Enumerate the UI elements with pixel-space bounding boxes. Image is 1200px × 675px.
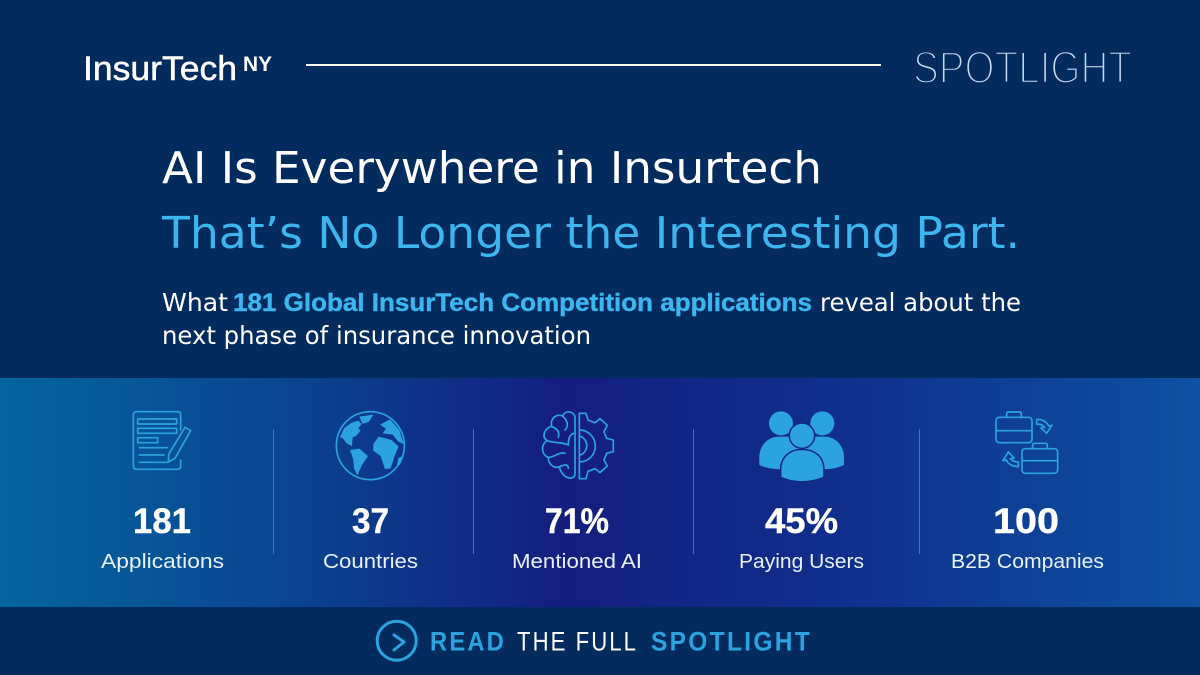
stat: 100 B2B companies: B2B Companies: [951, 550, 1104, 573]
subtitle: What: [162, 288, 228, 317]
subtitle: next phase of insurance innovation: [162, 321, 591, 350]
stat: 71% mentioned AI: [512, 412, 642, 573]
call to action: THE FULL: [517, 626, 638, 656]
stat: 71% mentioned AI: 71%: [545, 502, 609, 541]
title: That’s No Longer the Interesting Part.: [161, 208, 1020, 259]
icon: swapping briefcases: [996, 412, 1058, 473]
stat: 181 applications: 181: [133, 502, 191, 541]
call to action: SPOTLIGHT: [651, 626, 812, 656]
icon: globe: [336, 412, 404, 480]
stats band: [0, 378, 1200, 607]
spotlight wordmark: SPOTLIGHT: [913, 42, 1132, 93]
stat: 181 applications: Applications: [101, 550, 224, 573]
icon: brain and gear: [543, 412, 613, 479]
subtitle: [162, 288, 1021, 350]
call to action: [377, 621, 812, 660]
logo: InsurTech NY: InsurTech: [83, 50, 237, 88]
subtitle: reveal about the: [820, 288, 1021, 317]
stat: 181 applications: [101, 412, 224, 573]
title: AI Is Everywhere in Insurtech: [162, 143, 822, 194]
stat: 37 countries: Countries: [323, 550, 418, 573]
title: [161, 143, 1020, 259]
subtitle: 181 Global InsurTech Competition applications: [233, 289, 812, 317]
stat: 45% paying users: 45%: [765, 502, 838, 541]
logo: InsurTech NY: NY: [243, 52, 272, 76]
icon: document and pencil: [133, 412, 191, 469]
stat: 45% paying users: Paying Users: [739, 550, 864, 573]
header rule: [306, 64, 881, 66]
icon: three people: [759, 411, 844, 482]
header: [83, 42, 1132, 93]
stat: 100 B2B companies: [951, 412, 1104, 573]
stat: 100 B2B companies: 100: [993, 502, 1059, 541]
stat: 71% mentioned AI: Mentioned AI: [512, 550, 642, 573]
stat: 45% paying users: [739, 411, 864, 573]
call to action: READ: [430, 626, 506, 656]
stat: 37 countries: [323, 412, 418, 573]
stat: 37 countries: 37: [352, 502, 389, 541]
icon: circled chevron: [377, 621, 416, 660]
